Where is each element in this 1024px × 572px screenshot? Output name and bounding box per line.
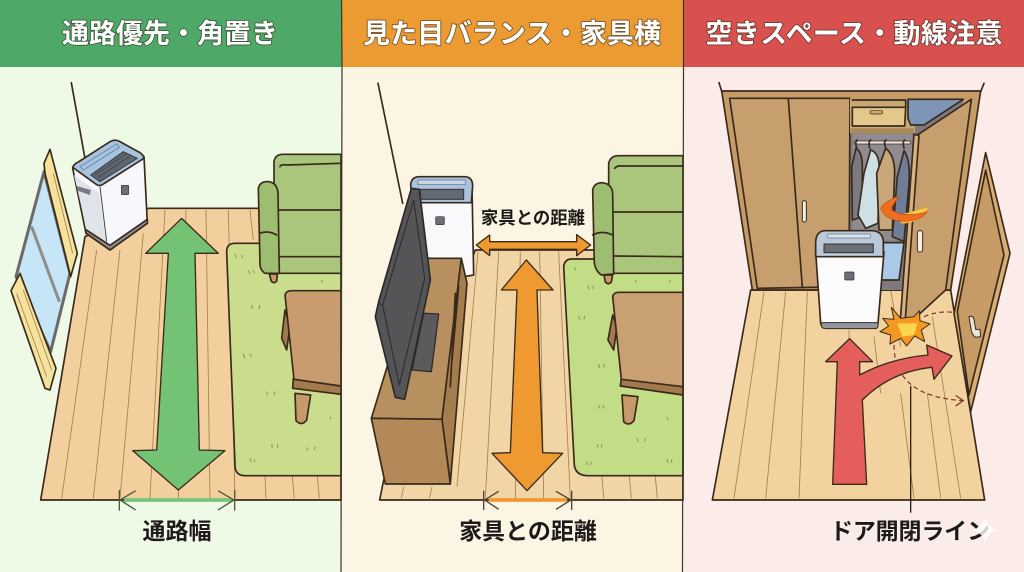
- heading: passage priority: [0, 0, 342, 67]
- heading: free space caution: 空きスペース・動線注意: [706, 19, 1002, 49]
- label: door opening line: ドア開閉ライン: [830, 518, 990, 544]
- rug: [227, 243, 341, 476]
- floor boards: [712, 290, 985, 500]
- floor scene: furniture side: [371, 83, 683, 510]
- panel dividers: [341, 0, 684, 572]
- heading: visual balance: [342, 0, 684, 67]
- icon: TV: [375, 188, 439, 399]
- hanging clothes: [852, 134, 912, 242]
- TV stand: [371, 258, 467, 484]
- closet: [719, 83, 984, 328]
- heading: visual balance: 見た目バランス・家具横: [363, 19, 661, 49]
- floor boards: [380, 250, 683, 500]
- rug: [564, 259, 683, 476]
- coffee table: [608, 292, 683, 424]
- swing motion mark: [881, 196, 929, 223]
- heading: passage priority: 通路優先・角置き: [62, 19, 278, 49]
- dimension: passage width: [119, 490, 235, 511]
- sofa: [593, 156, 683, 284]
- floor boards: [41, 208, 341, 500]
- arrow: vertical distance: [492, 260, 563, 491]
- arrow: passage: [133, 218, 225, 490]
- small label: furniture distance: 家具との距離: [481, 208, 585, 228]
- panel: passage priority corner placement: [0, 0, 342, 572]
- coffee table: [282, 291, 341, 424]
- panel: free space door line caution: [684, 0, 1024, 572]
- closet and floor scene: [712, 83, 1010, 513]
- icon: air purifier behind TV: [411, 177, 474, 277]
- icon: air purifier: [816, 231, 884, 329]
- open closet door: [900, 99, 971, 328]
- icon: sparkle: [972, 515, 998, 545]
- dashed door swing lines: [894, 312, 963, 406]
- floor scene: passage: [11, 83, 341, 511]
- sofa: [258, 154, 341, 283]
- dimension: furniture distance: [484, 491, 572, 510]
- arrow: horizontal furniture distance: [476, 235, 591, 256]
- side room door: [954, 153, 1010, 412]
- storage bin: [881, 243, 904, 280]
- panel: visual balance beside furniture: [342, 0, 684, 572]
- door line leader: [909, 386, 913, 513]
- window with curtains: [11, 149, 77, 390]
- heading: free space caution: [684, 0, 1024, 67]
- closet shelf and boxes: [850, 98, 963, 134]
- label: passage width: 通路幅: [142, 518, 212, 544]
- arrow: blocked path with branch: [826, 339, 952, 484]
- icon: air purifier: [73, 140, 147, 250]
- icon: collision burst: [880, 307, 930, 346]
- label: furniture distance: 家具との距離: [459, 518, 597, 544]
